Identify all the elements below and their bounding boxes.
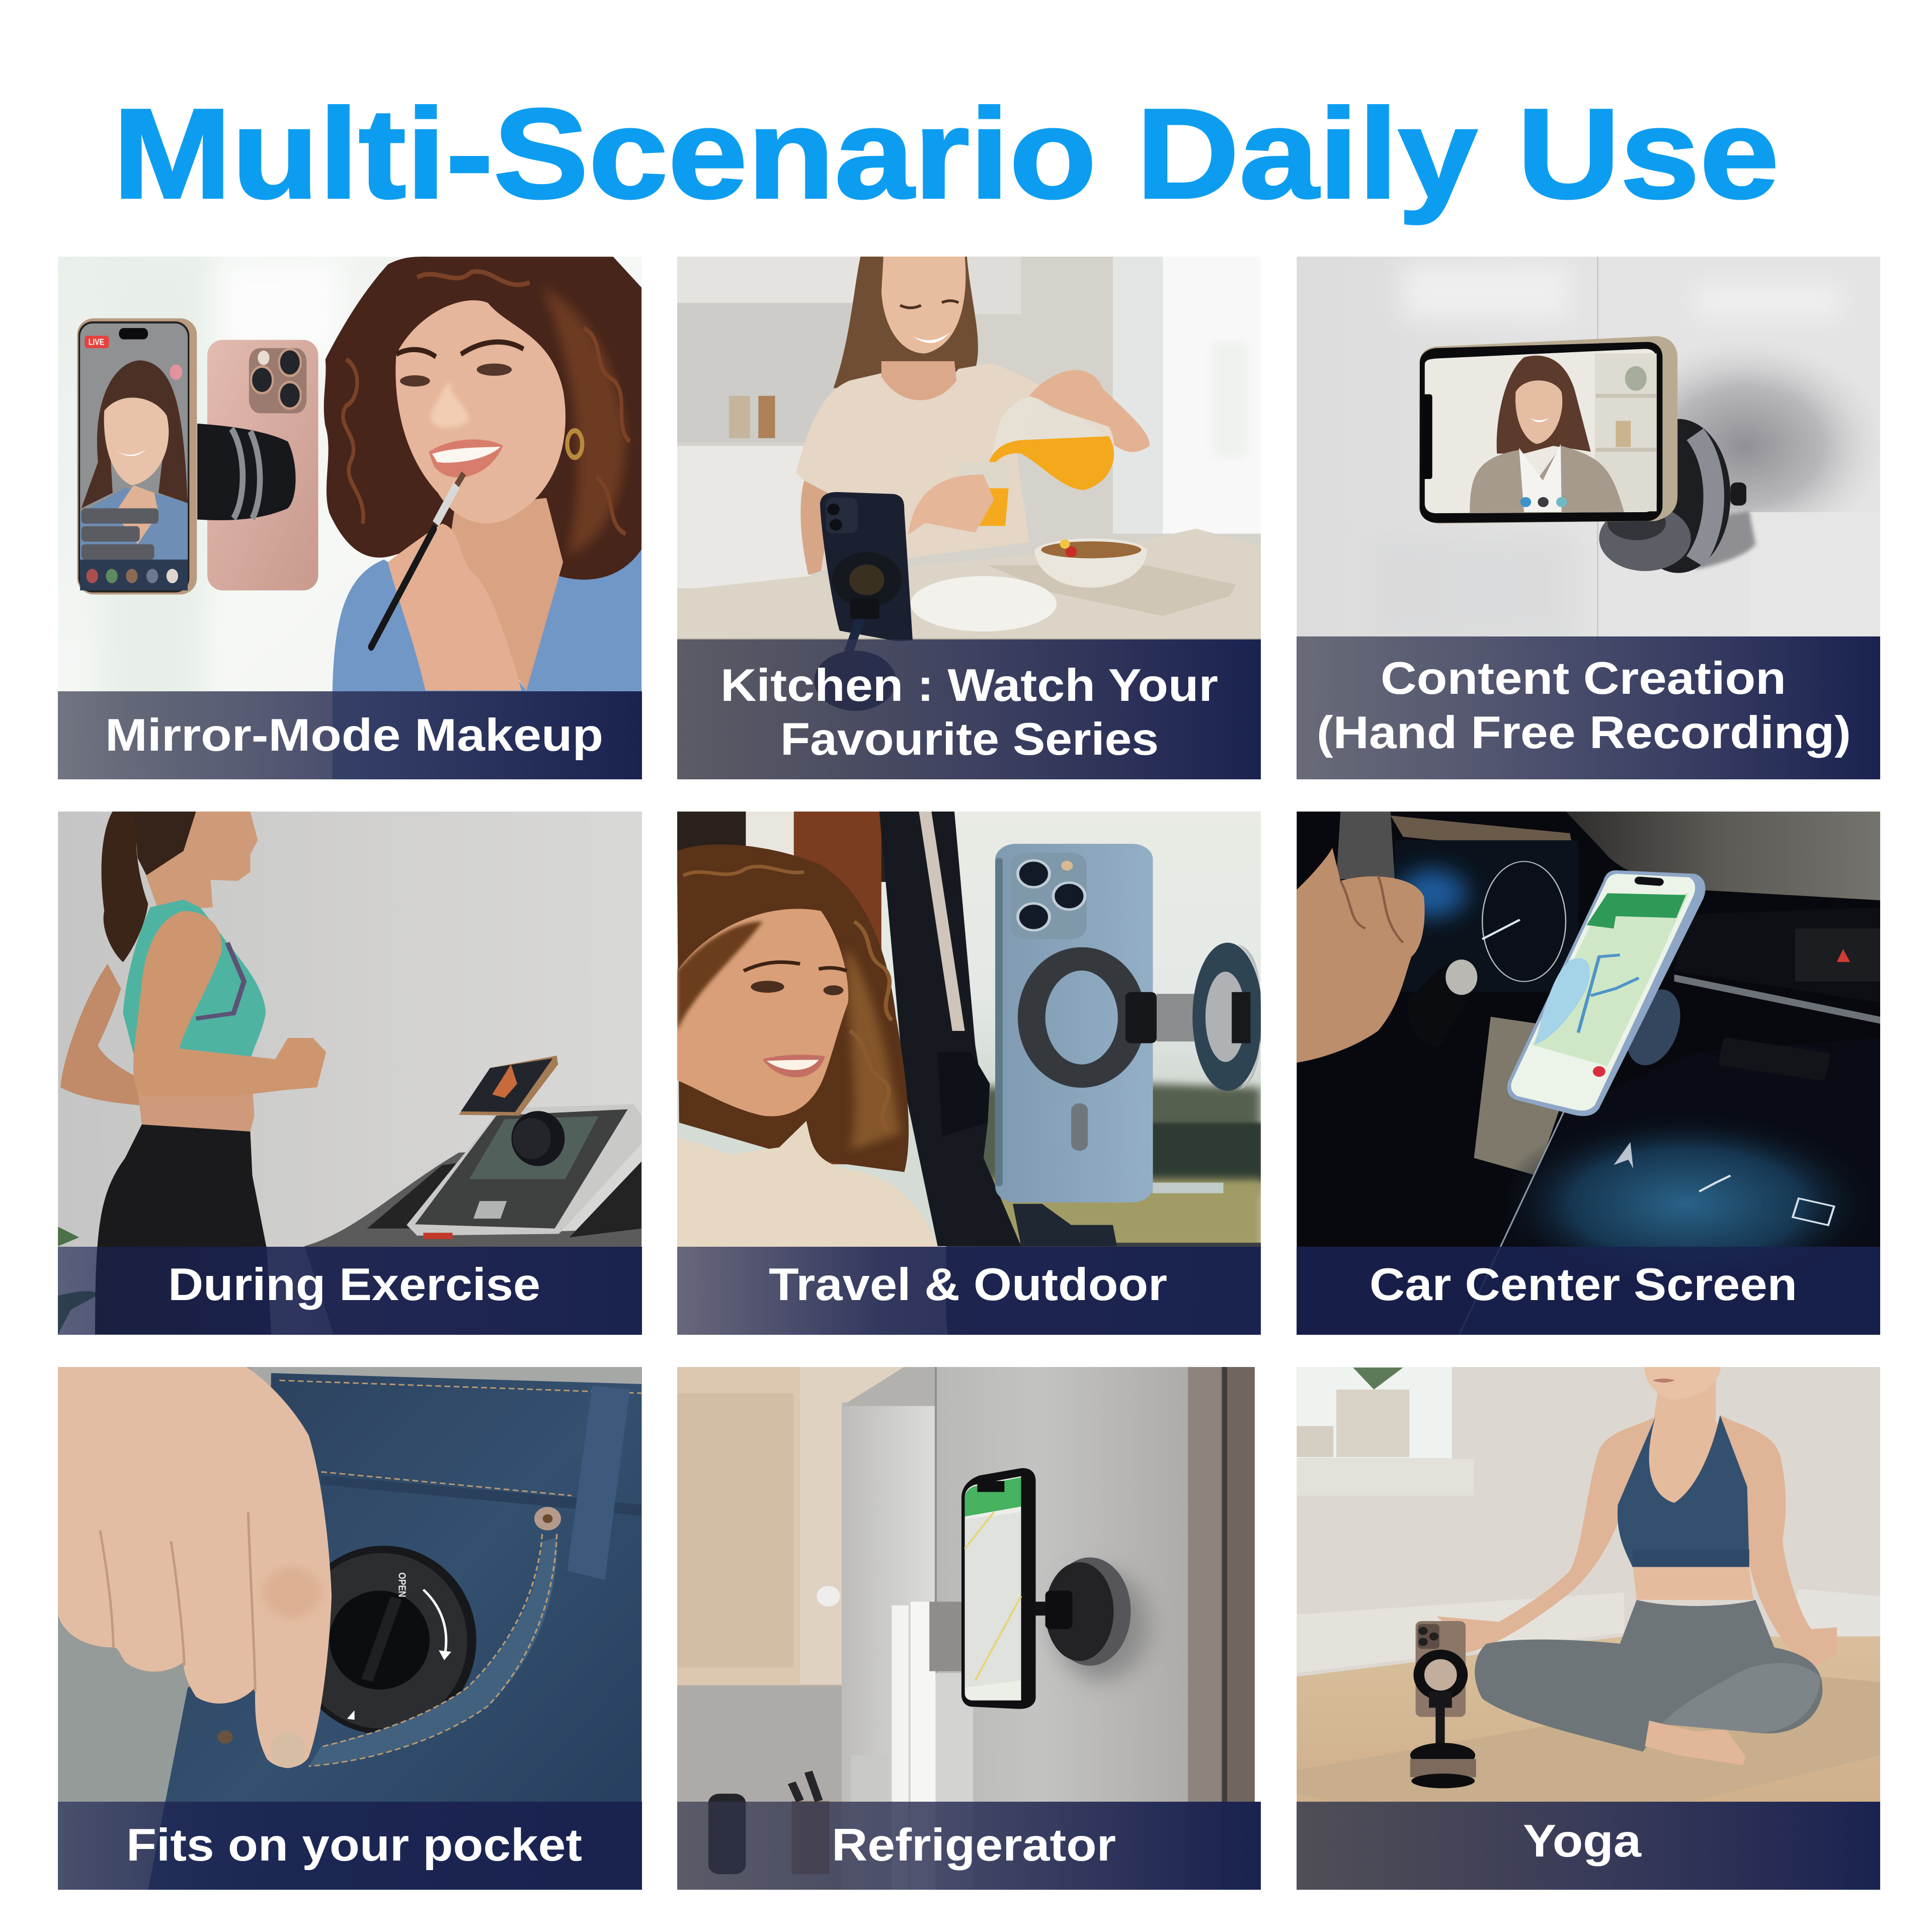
face and neck: [881, 361, 956, 400]
phone mount: [1617, 985, 1689, 1070]
phone: [1507, 870, 1706, 1116]
baseboard: [1297, 1592, 1624, 1673]
instrument cluster: [1395, 840, 1578, 992]
right arm and shoulder: [1720, 1415, 1837, 1666]
photo: woman applying lipstick with phone mirror: [58, 257, 642, 780]
photo: car dashboard with phone navigation: [1297, 812, 1881, 1338]
caption: Content Creation: [1381, 653, 1786, 704]
green nav header: [1586, 893, 1686, 929]
magnetic mount: [1049, 1557, 1131, 1666]
air vents and hazard: [1674, 907, 1881, 1003]
caption band: [677, 1802, 1261, 1890]
photo: phone mounted on fridge door: [677, 1367, 1261, 1892]
steering wheel: [1336, 812, 1395, 879]
face: [395, 300, 566, 523]
woman on screen: [1497, 356, 1591, 454]
phone on mount: [459, 1056, 558, 1115]
display icons: [1614, 1142, 1633, 1169]
caption: Favourite Series: [780, 714, 1159, 765]
feet: [1645, 1721, 1746, 1765]
sports bra: [1618, 1415, 1749, 1567]
mount disc: [291, 1546, 476, 1734]
woman sweater: [333, 529, 641, 780]
glass jug: [992, 397, 1114, 489]
caption band: [677, 639, 1261, 779]
torso: [1618, 1367, 1753, 1600]
window frame: [879, 812, 1021, 1246]
window sill: [1297, 1459, 1474, 1496]
plant: [58, 1227, 100, 1334]
caption band: [1297, 1247, 1880, 1335]
caption band: [58, 1802, 642, 1890]
jute rug: [1297, 1676, 1881, 1841]
phone back: [207, 340, 318, 590]
eyes and brows: [396, 342, 523, 357]
face: [677, 909, 848, 1116]
hand: [1297, 847, 1425, 1063]
caption: Fits on your pocket: [126, 1820, 582, 1871]
treadmill base: [304, 1151, 641, 1334]
arms: [800, 480, 833, 575]
panel: fits on your pocket: [58, 1367, 642, 1890]
neck and chest: [446, 498, 563, 690]
wood cabinet: [677, 1367, 844, 1685]
photo: woman meditating with phone stand: [1297, 1367, 1881, 1891]
panel: kitchen: [677, 257, 1261, 781]
hair: [324, 257, 641, 580]
panel: mirror-mode makeup: [58, 257, 642, 780]
distant hills and field: [954, 1084, 1261, 1193]
phone front: [77, 318, 197, 595]
curls: [683, 866, 892, 1130]
phone: [1419, 336, 1677, 524]
caption: Car Center Screen: [1370, 1259, 1797, 1310]
leggings: [95, 1124, 271, 1334]
photo: hand pushing mount into jeans pocket: [58, 1367, 642, 1890]
napkin, bowl and plate: [988, 565, 1236, 616]
caption band: [58, 691, 642, 779]
arm and fist: [133, 911, 326, 1096]
vehicle interior: [677, 812, 952, 882]
caption band: [1297, 636, 1880, 779]
caption: Kitchen : Watch Your: [720, 660, 1218, 711]
handles: [892, 1605, 909, 1891]
caption band: [1297, 1802, 1880, 1890]
panel: yoga: [1297, 1367, 1881, 1891]
panel: car center screen: [1297, 812, 1881, 1338]
teal sports top: [123, 900, 266, 1060]
caption band: [58, 1247, 642, 1335]
mount body: [1626, 419, 1730, 573]
midriff: [133, 1056, 255, 1132]
hair: [833, 257, 978, 388]
knit sweater: [677, 1121, 948, 1337]
center display: [1457, 1038, 1881, 1338]
lower cabinets: [677, 446, 811, 588]
left arm and shoulder: [1436, 1417, 1655, 1653]
phone: [961, 1468, 1036, 1709]
mount shadow: [1057, 1571, 1148, 1680]
curls: [343, 271, 630, 534]
head and neck: [133, 812, 199, 882]
lip brush: [371, 529, 434, 647]
window and plants: [1297, 1367, 1452, 1458]
shirt: [796, 363, 1042, 573]
pocket edge: [308, 1538, 557, 1766]
wood floor: [1297, 1637, 1881, 1890]
map: [1533, 893, 1689, 1066]
title: Multi-Scenario Daily Use: [113, 82, 1779, 225]
caption: Refrigerator: [832, 1820, 1116, 1871]
phone on stand: [1416, 1621, 1466, 1717]
belt loop: [567, 1386, 630, 1580]
leggings: [1475, 1600, 1822, 1752]
orange juice: [986, 436, 1114, 490]
blue phone: [995, 844, 1153, 1202]
ponytail: [102, 812, 148, 962]
holding hand: [909, 474, 994, 534]
video call screen: [1425, 349, 1657, 513]
rear arm: [60, 964, 144, 1106]
photo: woman pouring juice with phone on stand: [677, 257, 1261, 781]
caption: During Exercise: [168, 1259, 540, 1310]
caption: Travel & Outdoor: [769, 1259, 1167, 1310]
photo: woman in vehicle with phone on window mount: [677, 812, 1263, 1338]
caption: Yoga: [1523, 1816, 1642, 1867]
live badge: LIVE: [89, 338, 104, 347]
caption: Mirror-Mode Makeup: [105, 710, 603, 761]
hand: [388, 524, 521, 690]
charging slot: [1071, 1103, 1088, 1151]
back wall: [677, 1686, 842, 1891]
photo: woman jogging on treadmill: [58, 812, 642, 1337]
jeans: [148, 1373, 641, 1890]
kettle and knife block: [708, 1794, 746, 1874]
counter top: [677, 529, 1261, 781]
panel: travel and outdoor: [677, 812, 1263, 1338]
rivet: [534, 1507, 561, 1531]
phone on stand: [820, 492, 913, 641]
fridge doors: [842, 1402, 936, 1892]
caption band: [677, 1247, 1261, 1335]
stalk: [1407, 965, 1475, 1046]
magnetic mount: [197, 424, 296, 520]
hand: [58, 1367, 332, 1767]
live badge: [85, 336, 109, 348]
folding arm: [1157, 994, 1232, 1041]
center console: [1474, 1017, 1586, 1176]
juice glass: [958, 462, 1011, 529]
window suction mount: [1192, 943, 1263, 1091]
dashboard top: [1566, 812, 1881, 900]
magnetic ring: [1031, 959, 1132, 1076]
panel: during exercise: [58, 812, 642, 1337]
woman hair: [677, 844, 909, 1172]
wall shadow: [1603, 338, 1887, 554]
lips and teeth: [429, 439, 503, 477]
photo: phone mounted on wall in landscape: [1297, 257, 1887, 780]
panel: content creation: [1297, 257, 1887, 780]
photo: hand pushing mount into jeans pocket: OPEN: [396, 1572, 408, 1597]
caption: (Hand Free Recording): [1317, 707, 1851, 758]
panel: refrigerator: [677, 1367, 1261, 1892]
treadmill console: [407, 1104, 641, 1236]
earring: [567, 431, 582, 457]
